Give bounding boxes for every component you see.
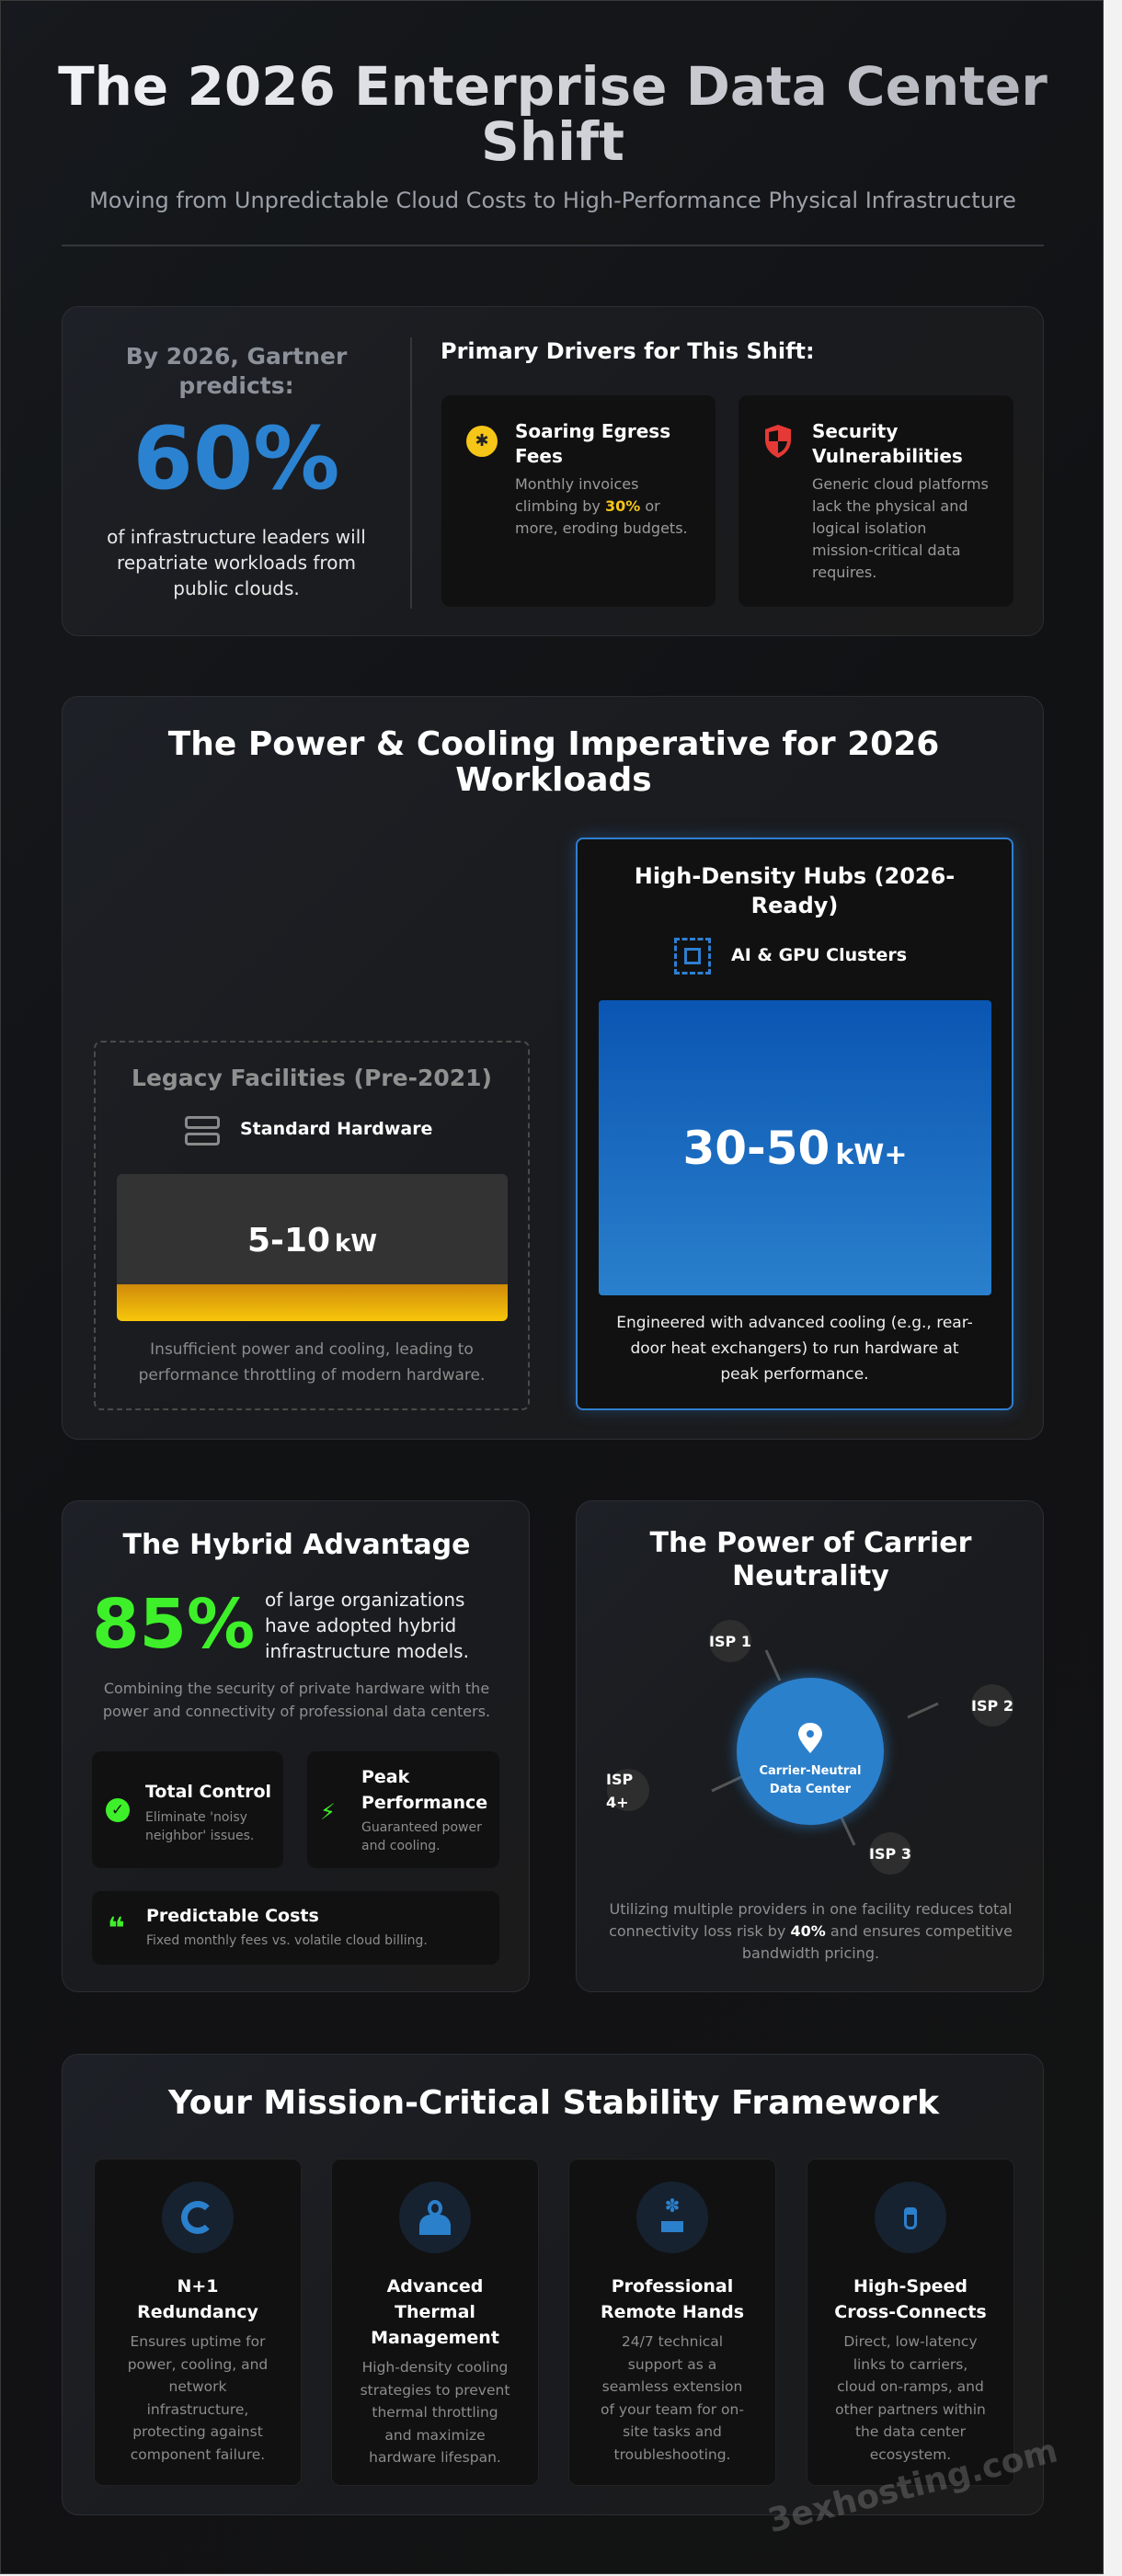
- card: N+1 redundancy: [94, 2159, 302, 2486]
- panel: hybrid advantage: [62, 1500, 530, 1992]
- legacy subtitle with server icon: [185, 1116, 432, 1146]
- panel: power and cooling: [62, 696, 1044, 1440]
- node: ISP 1: ISP 1: [709, 1633, 751, 1650]
- driver card: security: [738, 395, 1013, 607]
- egress title: Fees: [515, 445, 563, 467]
- prediction block: [107, 343, 366, 599]
- node: ISP 1: [709, 1620, 751, 1662]
- card: N+1 redundancy: power, cooling, and: [128, 2355, 268, 2372]
- card: thermal management: strategies to prevent: [361, 2381, 509, 2398]
- feature: peak performance: Guaranteed power and cooling.: [361, 1820, 482, 1853]
- legacy title: Legacy Facilities (Pre-2021): [132, 1065, 492, 1091]
- big stat 60%: 60%: [132, 409, 340, 509]
- icon: check: ✓: [111, 1801, 124, 1819]
- high-density bar 30-50 kW: [599, 1000, 991, 1295]
- card: thermal management: Advanced: [387, 2276, 483, 2297]
- feature: total control: Total Control: [145, 1782, 271, 1802]
- card: remote hands: troubleshooting.: [614, 2445, 730, 2462]
- card: N+1 redundancy: N+1: [177, 2276, 219, 2297]
- security text: requires.: [812, 564, 876, 581]
- icon: quote: ❝: [108, 1910, 125, 1945]
- icon: hands: ✽: [665, 2194, 680, 2217]
- icon: circle notch: [162, 2182, 234, 2253]
- high-density description: Engineered with advanced cooling (e.g., rear-: [616, 1314, 973, 1332]
- card: remote hands: 24/7 technical: [622, 2333, 723, 2350]
- icon: check: [106, 1798, 130, 1822]
- icon: hands: [636, 2182, 708, 2253]
- card: remote hands: site tasks and: [623, 2423, 722, 2440]
- egress text: more, eroding budgets.: [515, 519, 688, 537]
- watermark: 3exhosting.com: [764, 2433, 1061, 2540]
- high-density bar 30-50 kW: 30-50kW+: [682, 1122, 908, 1175]
- card: remote hands: of your team for on-: [601, 2401, 744, 2418]
- lead text: predicts:: [178, 372, 294, 399]
- card: N+1 redundancy: protecting against: [132, 2423, 263, 2440]
- stat description: public clouds.: [173, 577, 300, 599]
- icon: shield: [765, 425, 791, 458]
- card: N+1 redundancy: component failure.: [131, 2445, 265, 2462]
- lead text: By 2026, Gartner: [126, 343, 347, 370]
- card: N+1 redundancy: Redundancy: [137, 2302, 258, 2322]
- egress text: climbing by 30% or: [515, 497, 660, 515]
- legacy subtitle with server icon: Standard Hardware: [240, 1119, 432, 1139]
- high-density description: peak performance.: [720, 1365, 869, 1384]
- card: N+1 redundancy: infrastructure,: [147, 2401, 248, 2418]
- card: N+1 redundancy: network: [169, 2378, 226, 2395]
- card: thermal management: Management: [371, 2328, 499, 2348]
- security text: [812, 475, 989, 581]
- card: remote hands: Remote Hands: [601, 2302, 744, 2322]
- node: ISP 4+: 4+: [606, 1794, 629, 1811]
- security text: logical isolation: [812, 519, 926, 537]
- node: ISP 2: [971, 1684, 1013, 1727]
- node: ISP 4+: ISP: [606, 1771, 633, 1788]
- security title: Security: [812, 420, 898, 442]
- card: cross-connects: other partners within: [835, 2401, 986, 2418]
- legacy description: Insufficient power and cooling, leading to performance throttling of modern hardware.: [139, 1340, 485, 1385]
- AI GPU label with chip icon: AI & GPU Clusters: [731, 945, 907, 965]
- stat description: repatriate workloads from: [117, 552, 356, 574]
- framework heading: Your Mission-Critical Stability Framework: [168, 2084, 939, 2122]
- hub: carrier-neutral data center: [737, 1678, 884, 1825]
- legacy card: [94, 1041, 530, 1410]
- card: cross-connects: cloud on-ramps, and: [837, 2378, 984, 2395]
- power heading: The Power & Cooling Imperative for 2026 Workloads: [168, 725, 939, 799]
- hub: carrier-neutral data center: Data Center: [770, 1783, 852, 1796]
- icon: coins: ✱: [475, 431, 489, 450]
- driver card: egress fees: [441, 395, 716, 607]
- node: ISP 3: [869, 1832, 911, 1875]
- stat text: of large organizations have adopted hybrid infrastructure models.: [265, 1589, 469, 1662]
- high-density description: [616, 1314, 973, 1384]
- node: ISP 4+: [606, 1769, 649, 1811]
- egress title: [515, 420, 670, 467]
- node: ISP 3: ISP 3: [869, 1845, 911, 1863]
- stat description: [107, 526, 366, 599]
- hybrid heading: The Hybrid Advantage: [122, 1529, 471, 1561]
- drivers heading: Primary Drivers for This Shift:: [441, 338, 815, 364]
- security title: Vulnerabilities: [812, 445, 963, 467]
- legacy bar 5-10 kW: [117, 1174, 508, 1321]
- feature: total control: [92, 1751, 283, 1868]
- security text: lack the physical and: [812, 497, 968, 515]
- legacy bar 5-10 kW: 5-10kW: [247, 1222, 377, 1260]
- stat description: of infrastructure leaders will: [107, 526, 366, 548]
- security title: [812, 420, 963, 467]
- hybrid description: Combining the security of private hardware with the power and connectivity of professional data centers.: [103, 1680, 490, 1720]
- feature: peak performance: Peak Performance: [361, 1767, 487, 1813]
- carrier heading: The Power of Carrier Neutrality: [650, 1527, 971, 1592]
- card: thermal management: Thermal: [395, 2302, 475, 2322]
- card: remote hands: Professional: [612, 2276, 733, 2297]
- subtitle: Moving from Unpredictable Cloud Costs to High-Performance Physical Infrastructure: [89, 188, 1016, 213]
- card: thermal management: and maximize: [384, 2427, 486, 2444]
- lead text: [126, 343, 348, 399]
- feature: predictable costs: [92, 1891, 499, 1965]
- icon: coins: [466, 426, 498, 457]
- feature: total control: Eliminate 'noisy neighbor' issues.: [145, 1810, 254, 1843]
- egress title: Soaring Egress: [515, 420, 670, 442]
- card: cross-connects: links to carriers,: [853, 2355, 967, 2372]
- panel: gartner prediction and drivers: [62, 306, 1044, 636]
- card: N+1 redundancy: Ensures uptime for: [130, 2333, 265, 2350]
- card: cross-connects: the data center: [855, 2423, 966, 2440]
- card: thermal management: High-density cooling: [362, 2359, 508, 2376]
- card: cross-connects: High-Speed: [853, 2276, 967, 2297]
- panel: stability framework: [62, 2054, 1044, 2515]
- node: ISP 2: ISP 2: [971, 1697, 1013, 1715]
- card: thermal management: thermal throttling: [372, 2404, 498, 2421]
- AI GPU label with chip icon: [674, 938, 907, 975]
- network diagram: [606, 1620, 1013, 1875]
- card: cross-connects: [807, 2159, 1014, 2486]
- icon: plug: ⚡: [320, 1799, 336, 1825]
- icon: plug: [875, 2182, 946, 2253]
- feature: peak performance: [307, 1751, 499, 1868]
- card: thermal management: [331, 2159, 539, 2486]
- card: cross-connects: Cross-Connects: [834, 2302, 987, 2322]
- security text: Generic cloud platforms: [812, 475, 989, 493]
- high-density card: [576, 838, 1013, 1410]
- hub: carrier-neutral data center: Carrier-Neutral: [759, 1764, 862, 1778]
- card: remote hands: support as a: [628, 2355, 716, 2372]
- card: thermal management: hardware lifespan.: [369, 2449, 501, 2466]
- feature: predictable costs: Predictable Costs: [146, 1906, 319, 1926]
- panel: carrier neutrality: [576, 1500, 1044, 1992]
- carrier description: Utilizing multiple providers in one facility reduces total connectivity loss risk by 40% and ensures competitive bandwidth pricing.: [609, 1900, 1013, 1962]
- egress text: Monthly invoices: [515, 475, 638, 493]
- card: cross-connects: Direct, low-latency: [843, 2333, 978, 2350]
- card: remote hands: [568, 2159, 776, 2486]
- icon: user: [399, 2182, 471, 2253]
- card: cross-connects: ecosystem.: [870, 2445, 951, 2462]
- high-density title: High-Density Hubs (2026-Ready): [635, 863, 955, 918]
- feature: predictable costs: Fixed monthly fees vs. volatile cloud billing.: [146, 1933, 428, 1948]
- title: The 2026 Enterprise Data Center Shift: [58, 55, 1048, 173]
- high-density description: door heat exchangers) to run hardware at: [630, 1339, 959, 1358]
- big stat 85%: 85%: [92, 1585, 255, 1664]
- card: remote hands: seamless extension: [602, 2378, 742, 2395]
- security text: mission-critical data: [812, 541, 961, 559]
- egress text: [515, 475, 688, 537]
